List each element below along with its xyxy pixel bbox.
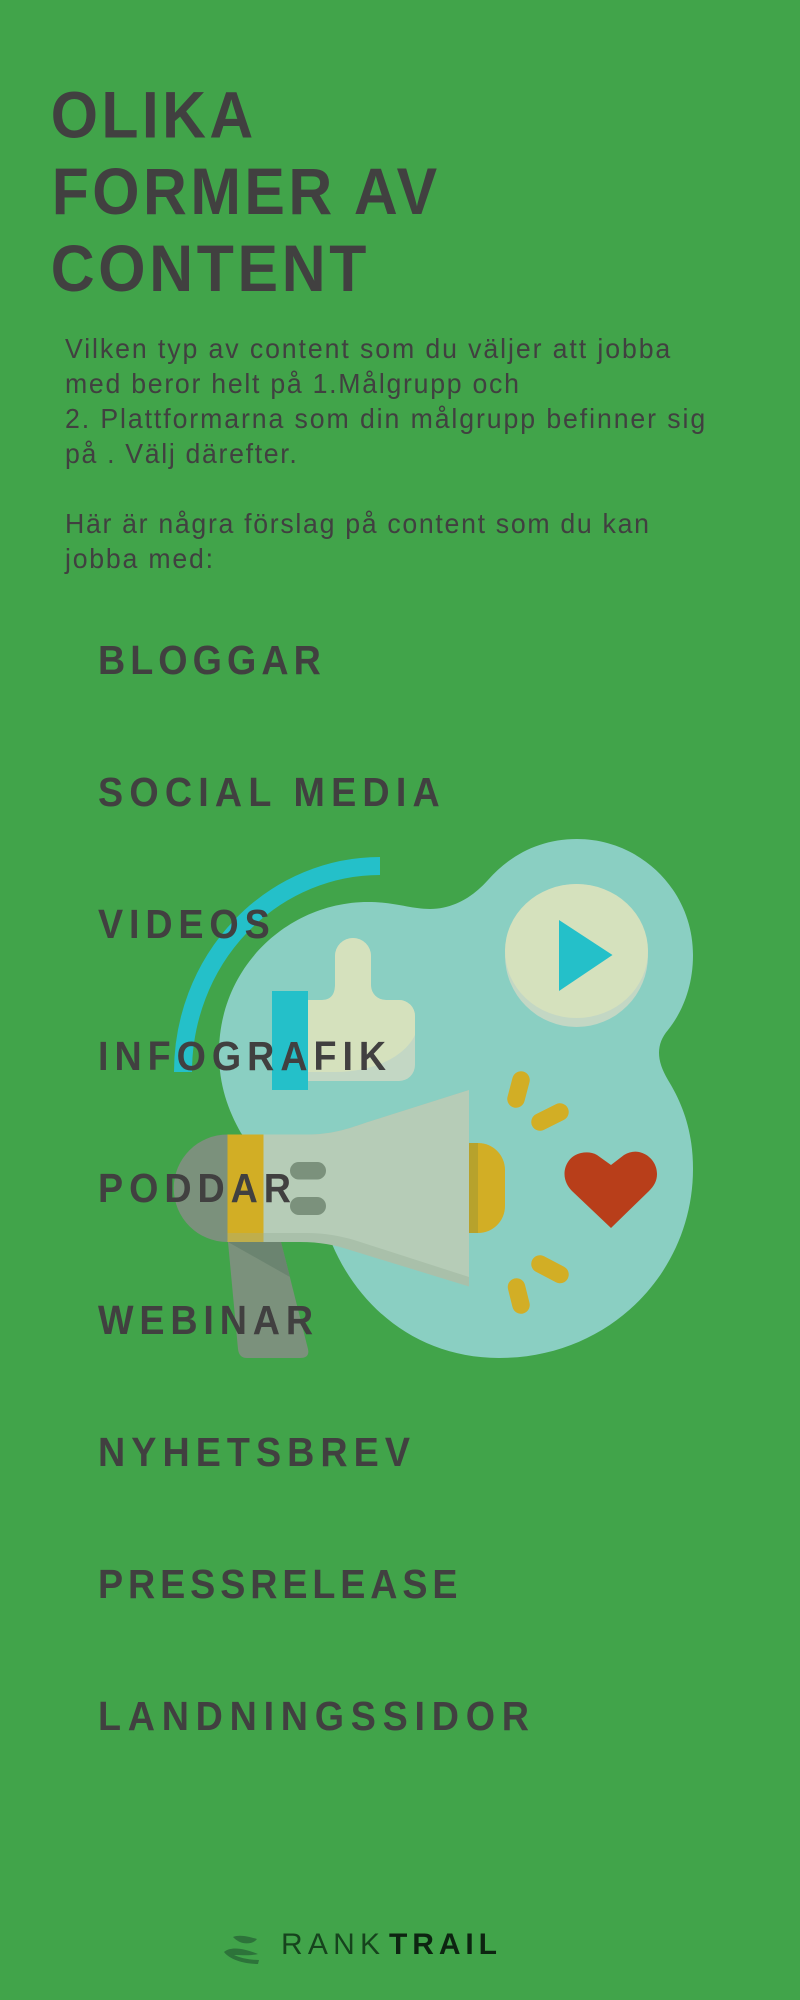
yellow sound dashes — [516, 1080, 560, 1305]
logo wordmark: RANK — [281, 1928, 380, 1961]
item: landningssidor: LANDNINGSSIDOR — [98, 1695, 529, 1739]
intro text — [64, 333, 705, 574]
intro text: med beror helt på 1.Målgrupp och — [65, 368, 519, 399]
item: videos: VIDEOS — [98, 903, 270, 947]
title: FORMER AV — [52, 156, 437, 229]
list of content types — [98, 639, 529, 1739]
buttons — [290, 1162, 326, 1180]
logo: Ranktrail — [224, 1928, 497, 1964]
intro text: jobba med: — [64, 543, 213, 574]
illustration: marketing megaphone scene — [174, 839, 693, 1358]
icon: thumbs up — [272, 938, 415, 1090]
item: infografik: INFOGRAFIK — [98, 1035, 386, 1079]
icon: logo leaves — [224, 1936, 259, 1964]
cyan arc — [183, 866, 380, 1072]
item: pressrelease: PRESSRELEASE — [98, 1563, 458, 1607]
horn — [263, 1090, 469, 1286]
title — [51, 79, 437, 306]
item: poddar: PODDAR — [98, 1167, 291, 1211]
logo: Ranktrail: TRAIL — [389, 1928, 497, 1961]
intro text: Vilken typ av content som du väljer att jobba — [65, 333, 671, 364]
icon: heart — [564, 1152, 657, 1228]
back cap — [174, 1134, 228, 1242]
icon: play button — [505, 884, 648, 1027]
item: nyhetsbrev: NYHETSBREV — [98, 1431, 410, 1475]
background blob — [219, 839, 693, 1358]
intro text: på . Välj därefter. — [65, 438, 297, 469]
intro text: Här är några förslag på content som du kan — [65, 508, 649, 539]
item: bloggar: BLOGGAR — [98, 639, 321, 683]
title: OLIKA — [51, 79, 253, 152]
mouth — [469, 1143, 505, 1233]
band — [228, 1134, 264, 1242]
item: webinar: WEBINAR — [98, 1299, 313, 1343]
handle — [228, 1242, 308, 1358]
title: CONTENT — [51, 233, 367, 306]
intro text: 2. Plattformarna som din målgrupp befinner sig — [65, 403, 705, 434]
item: social media: SOCIAL MEDIA — [98, 771, 440, 815]
icon: megaphone — [174, 1090, 505, 1358]
